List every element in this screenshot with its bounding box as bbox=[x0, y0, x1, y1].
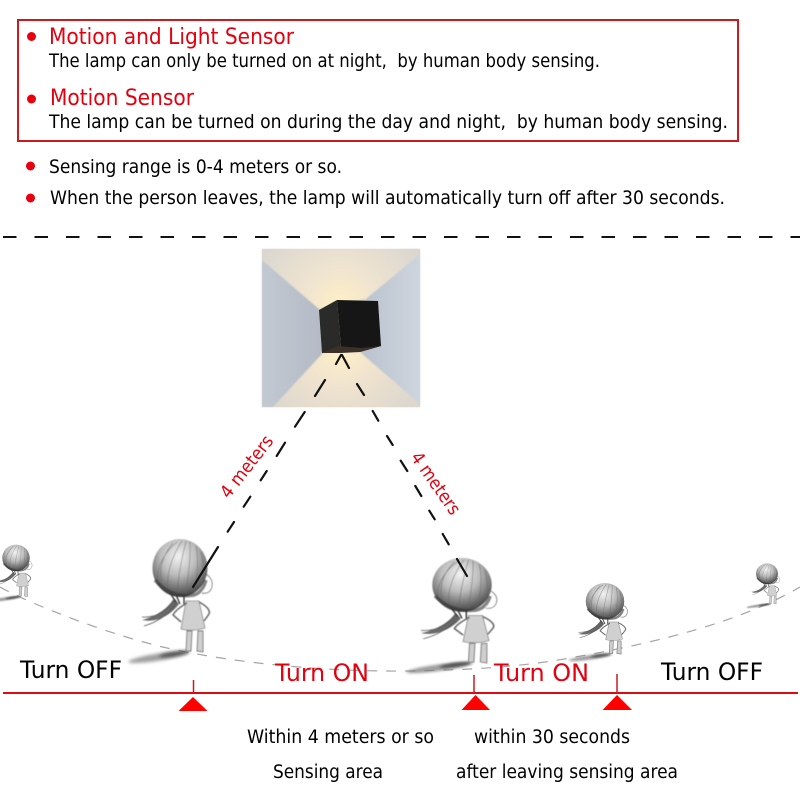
walking path bbox=[0, 587, 800, 671]
panel border bbox=[18, 20, 738, 141]
sensing lines bbox=[228, 355, 449, 544]
sensing line: right over girl bbox=[457, 559, 467, 576]
girl: far right bbox=[746, 563, 780, 609]
marker: second bbox=[462, 695, 490, 710]
bullet: range bbox=[26, 162, 35, 170]
timeline bbox=[3, 674, 798, 711]
label: left 4 meters: 4 meters bbox=[216, 431, 278, 503]
girl: entering range bbox=[128, 539, 212, 665]
state: sensing on: Turn ON bbox=[274, 659, 369, 687]
label: right 4 meters: 4 meters bbox=[406, 448, 465, 519]
state: right off: Turn OFF bbox=[660, 658, 763, 686]
notes list bbox=[26, 156, 725, 209]
bullet: motion and light bbox=[27, 32, 36, 41]
captions bbox=[247, 727, 678, 783]
text: sensing range: Sensing range is 0-4 meters or so. bbox=[49, 156, 342, 178]
caption: after leaving: after leaving sensing area bbox=[456, 762, 678, 783]
heading: motion sensor: Motion Sensor bbox=[50, 86, 195, 111]
girl: far left bbox=[0, 545, 32, 603]
marker: third bbox=[602, 695, 632, 710]
heading: motion and light sensor: Motion and Light Sensor bbox=[49, 25, 295, 50]
bullet: motion bbox=[27, 94, 36, 104]
state: delay on: Turn ON bbox=[493, 659, 589, 687]
caption: within 4 meters: Within 4 meters or so bbox=[247, 727, 434, 748]
text: auto off: When the person leaves, the lamp will automatically turn off after 30 seconds. bbox=[50, 187, 725, 209]
girl: middle right bbox=[568, 583, 628, 663]
text: day and night: The lamp can be turned on during the day and night, by human body sensing. bbox=[48, 111, 728, 133]
bullet: auto off bbox=[26, 194, 35, 202]
state: left off: Turn OFF bbox=[19, 656, 122, 684]
girl: leaving range bbox=[406, 558, 497, 675]
panel: sensor modes bbox=[18, 20, 738, 141]
caption: within 30 seconds: within 30 seconds bbox=[474, 727, 630, 748]
text: night only: The lamp can only be turned on at night, by human body sensing. bbox=[48, 50, 600, 72]
photo: wall lamp bbox=[262, 249, 420, 407]
sensing line: left over girl bbox=[193, 547, 218, 587]
caption: sensing area: Sensing area bbox=[273, 762, 383, 783]
icon: lamp cube bbox=[319, 300, 381, 353]
state labels bbox=[19, 656, 763, 687]
marker: first bbox=[178, 697, 208, 711]
